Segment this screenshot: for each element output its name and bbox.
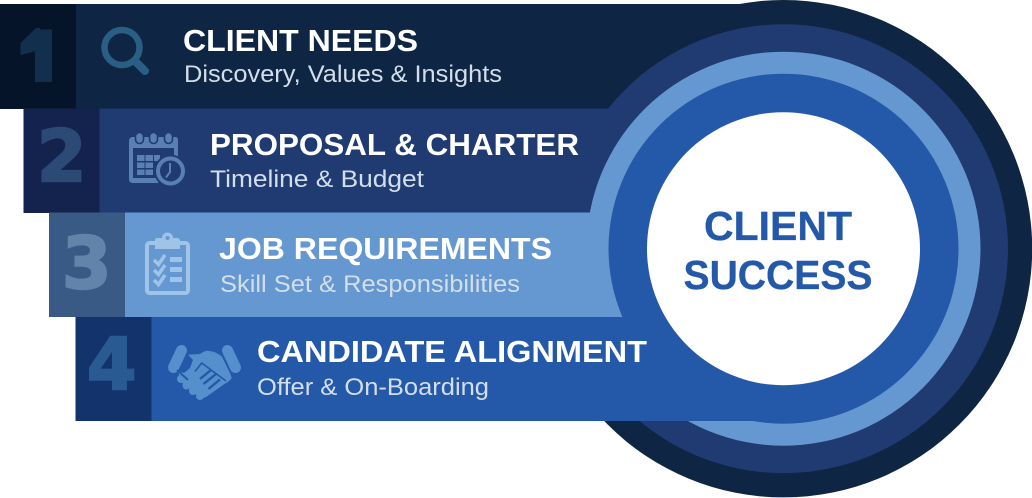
center circle: client success: SUCCESS — [684, 252, 872, 298]
panel: step 4 candidate alignment: CANDIDATE ALIGNMENT — [257, 334, 647, 369]
panel: step 1 client needs — [0, 4, 742, 109]
panel: step 2 proposal and charter: PROPOSAL & CHARTER — [210, 127, 579, 162]
panel: step 3 job requirements: 3 — [62, 222, 111, 305]
panel: step 4 candidate alignment — [76, 317, 752, 421]
panel: step 2 proposal and charter: 2 — [37, 115, 86, 198]
inner ring: royal blue — [608, 74, 958, 424]
icon: handshake — [174, 350, 236, 400]
panel: step 2 proposal and charter: Timeline & Budget — [210, 166, 424, 193]
panel: step 4 candidate alignment: 4 — [87, 323, 136, 406]
panel: step 3 job requirements: Skill Set & Responsibilities — [220, 271, 520, 298]
middle ring: navy — [559, 24, 1008, 473]
icon: magnifying glass — [104, 30, 145, 71]
outer ring: dark navy — [535, 0, 1032, 497]
icon: calendar with clock — [129, 132, 187, 188]
panel: step 2 proposal and charter — [24, 108, 724, 213]
panel: step 1 client needs: CLIENT NEEDS — [183, 23, 418, 58]
panel: step 3 job requirements — [49, 212, 729, 317]
icon: clipboard checklist — [147, 232, 188, 293]
panel: step 4 candidate alignment: Offer & On-Boarding — [257, 374, 489, 401]
panel: step 1 client needs: Discovery, Values & Insights — [184, 61, 502, 88]
panel: step 1 client needs: 1 — [17, 18, 66, 101]
middle ring: light blue — [586, 52, 980, 446]
center circle: client success: CLIENT — [704, 203, 852, 249]
center circle: client success — [647, 112, 920, 385]
panel: step 3 job requirements: JOB REQUIREMENTS — [219, 231, 552, 266]
